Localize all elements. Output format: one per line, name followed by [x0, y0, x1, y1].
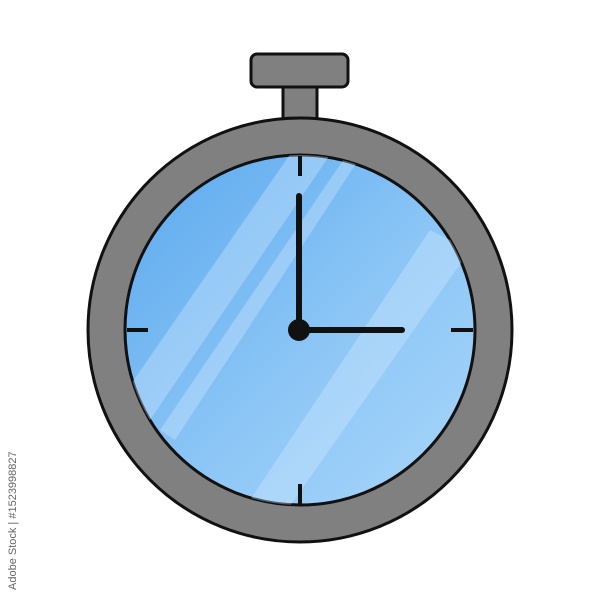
icon: outer ring [88, 118, 512, 542]
hour ticks [127, 156, 473, 505]
icon: stem [283, 84, 317, 122]
stopwatch illustration [8, 52, 514, 590]
icon: top button [251, 54, 348, 87]
clock face [120, 140, 475, 520]
clock hands [288, 196, 402, 341]
side credit text: Adobe Stock | #1523998827 [7, 451, 19, 590]
